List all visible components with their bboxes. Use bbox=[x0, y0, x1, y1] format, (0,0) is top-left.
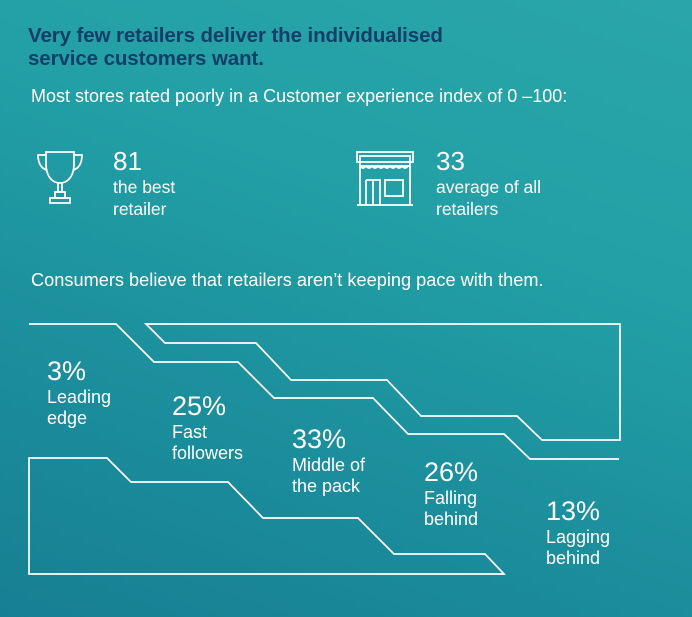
label: middle of pack bbox=[292, 424, 366, 496]
label: falling behind: behind bbox=[424, 509, 478, 529]
label: lagging behind: 13% bbox=[546, 496, 600, 526]
section heading: Consumers believe that retailers aren’t keeping pace with them. bbox=[31, 270, 544, 290]
icon: trophy bbox=[37, 151, 83, 204]
stat: best retailer bbox=[113, 146, 176, 219]
stat: average: 33 bbox=[436, 146, 465, 176]
label: middle of pack: Middle of bbox=[292, 455, 365, 475]
label: falling behind bbox=[424, 457, 478, 529]
label: leading edge: edge bbox=[47, 408, 87, 428]
label: lagging behind: behind bbox=[546, 548, 600, 568]
stat: best retailer: 81 bbox=[113, 146, 142, 176]
icon: store bbox=[356, 151, 414, 206]
label: leading edge bbox=[47, 356, 111, 428]
label: middle of pack: 33% bbox=[292, 424, 346, 454]
title: Very few retailers deliver the individualised bbox=[28, 24, 443, 47]
label: leading edge: 3% bbox=[47, 356, 86, 386]
label: lagging behind bbox=[546, 496, 610, 568]
stat: average: average of all bbox=[436, 177, 541, 197]
title: service customers want. bbox=[28, 47, 264, 70]
label: lagging behind: Lagging bbox=[546, 527, 610, 547]
label: fast followers bbox=[172, 391, 243, 463]
label: middle of pack: the pack bbox=[292, 476, 360, 496]
stat: average: retailers bbox=[436, 199, 498, 219]
label: fast followers: Fast bbox=[172, 422, 207, 442]
label: falling behind: 26% bbox=[424, 457, 478, 487]
label: fast followers: 25% bbox=[172, 391, 226, 421]
label: fast followers: followers bbox=[172, 443, 243, 463]
stat: best retailer: retailer bbox=[113, 199, 166, 219]
stat: average bbox=[436, 146, 541, 219]
label: leading edge: Leading bbox=[47, 387, 111, 407]
title bbox=[28, 24, 443, 70]
label: falling behind: Falling bbox=[424, 488, 477, 508]
subtitle: Most stores rated poorly in a Customer experience index of 0 –100: bbox=[31, 86, 567, 106]
stat: best retailer: the best bbox=[113, 177, 175, 197]
